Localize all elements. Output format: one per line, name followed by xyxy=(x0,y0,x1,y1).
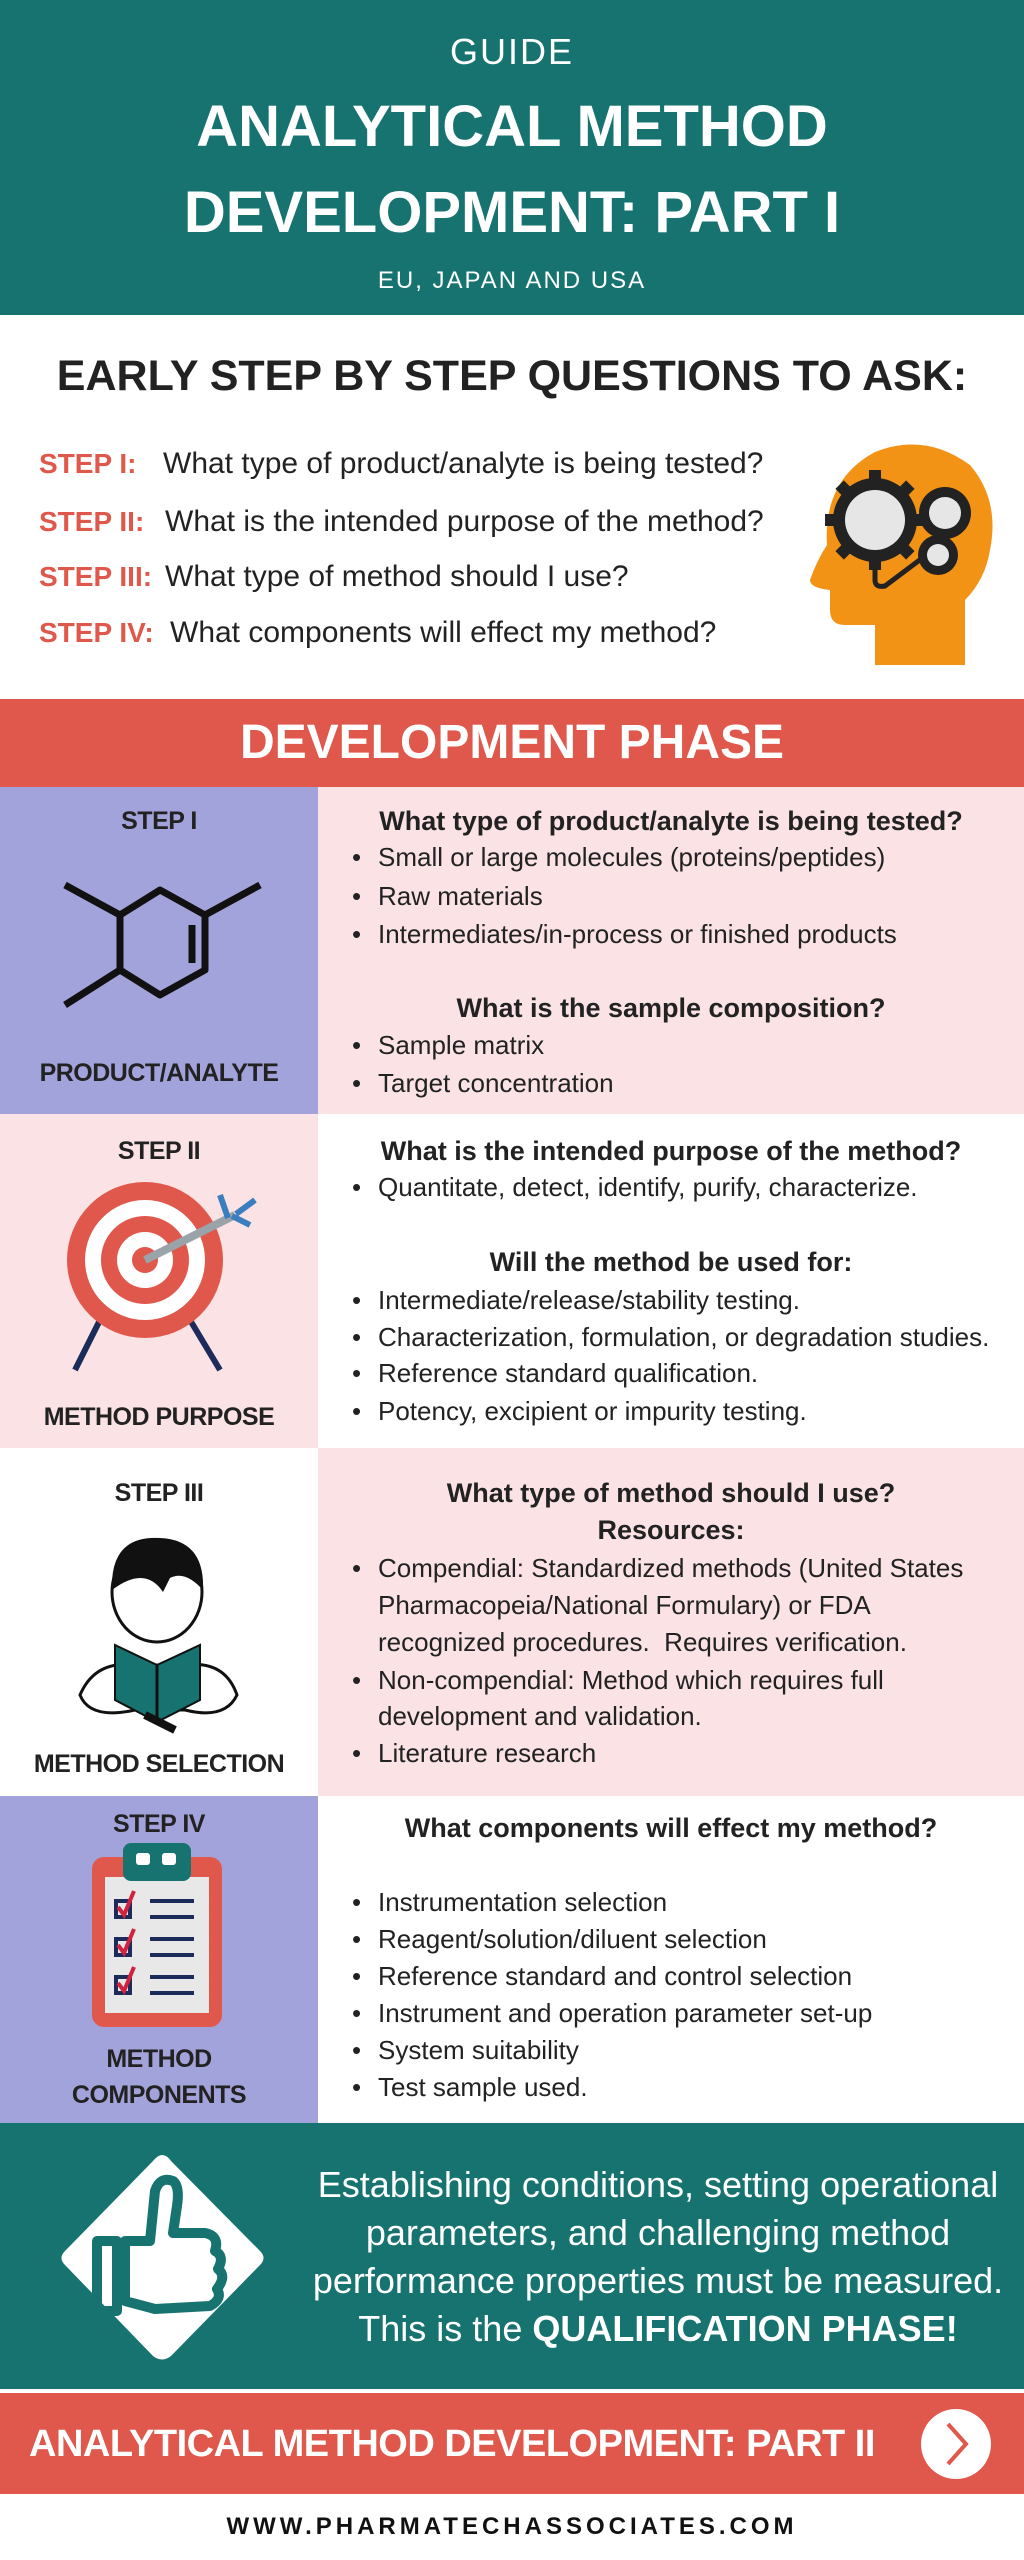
banner: development phase xyxy=(0,699,1024,787)
text: step III content: Pharmacopeia/National Formulary) or FDA xyxy=(378,1590,871,1620)
text: step III content: development and validation. xyxy=(378,1701,702,1731)
text: step II content: Potency, excipient or impurity testing. xyxy=(378,1396,807,1426)
icon: cyclohexene xyxy=(63,882,262,1008)
panel: step II xyxy=(0,1114,318,1448)
subtitle: guide: GUIDE xyxy=(450,31,574,72)
step question list: STEP II: xyxy=(39,506,144,537)
step question list: What is the intended purpose of the method? xyxy=(165,505,764,538)
step question list xyxy=(39,447,764,649)
text: step II content: What is the intended purpose of the method? xyxy=(381,1136,961,1166)
icon: reading child xyxy=(78,1538,239,1734)
text: step II content: Will the method be used for: xyxy=(490,1247,852,1277)
callout text: parameters, and challenging method xyxy=(366,2212,950,2253)
banner: part II link xyxy=(0,2393,1024,2494)
label: step III: STEP III xyxy=(115,1479,203,1507)
text: step II content: Quantitate, detect, identify, purify, characterize. xyxy=(378,1172,918,1202)
callout text xyxy=(313,2164,1003,2349)
text: step IV content xyxy=(353,1813,937,2102)
text: step III content: Resources: xyxy=(597,1515,745,1545)
text: step IV content: Instrument and operation parameter set-up xyxy=(378,1998,872,2028)
panel: step III xyxy=(318,1448,1024,1796)
icon: thumbs up diamond xyxy=(62,2155,264,2360)
title xyxy=(184,94,840,245)
text: step I content: Small or large molecules (proteins/peptides) xyxy=(378,842,885,872)
icon: arrow circle xyxy=(921,2409,991,2479)
label: step II: STEP II xyxy=(118,1137,200,1165)
step question list: STEP I: xyxy=(39,448,137,479)
link text: ANALYTICAL METHOD DEVELOPMENT: PART II xyxy=(29,2423,875,2465)
label: step I: STEP I xyxy=(121,807,197,835)
text: step II content: Reference standard qualification. xyxy=(378,1358,758,1388)
text: step III content: Non-compendial: Method which requires full xyxy=(378,1665,884,1695)
label: method purpose: METHOD PURPOSE xyxy=(44,1403,274,1431)
title: DEVELOPMENT: PART I xyxy=(184,180,840,245)
footer: website: WWW.PHARMATECHASSOCIATES.COM xyxy=(226,2513,798,2540)
callout text: performance properties must be measured. xyxy=(313,2260,1003,2301)
text: step I content: What type of product/analyte is being tested? xyxy=(379,806,963,836)
label: product/analyte: PRODUCT/ANALYTE xyxy=(40,1059,278,1087)
text: step IV content: System suitability xyxy=(378,2035,579,2065)
subtitle: regions: EU, JAPAN AND USA xyxy=(378,267,646,294)
text: step III content: recognized procedures. Requires verification. xyxy=(378,1627,907,1657)
text: step III content: What type of method should I use? xyxy=(447,1478,895,1508)
icon: target with arrow xyxy=(67,1182,257,1372)
callout panel xyxy=(0,2123,1024,2389)
text: step IV content: Test sample used. xyxy=(378,2072,588,2102)
step question list: What type of product/analyte is being tested? xyxy=(163,447,763,480)
title: ANALYTICAL METHOD xyxy=(196,94,828,159)
text: step I content: Sample matrix xyxy=(378,1030,544,1060)
heading: early questions: EARLY STEP BY STEP QUESTIONS TO ASK: xyxy=(57,352,967,400)
callout text: This is the QUALIFICATION PHASE! xyxy=(358,2308,958,2349)
text: step III content: Literature research xyxy=(378,1738,596,1768)
label: method components xyxy=(72,2045,246,2109)
panel: step IV xyxy=(0,1796,318,2123)
label: method selection: METHOD SELECTION xyxy=(34,1750,284,1778)
label: step IV: STEP IV xyxy=(113,1810,205,1838)
banner: development phase: DEVELOPMENT PHASE xyxy=(240,716,784,769)
text: step III content xyxy=(353,1478,963,1768)
label: method components: METHOD xyxy=(106,2045,212,2073)
text: step IV content: Instrumentation selection xyxy=(378,1887,667,1917)
text: step I content: What is the sample composition? xyxy=(456,993,886,1023)
icon: clipboard checklist xyxy=(92,1843,222,2027)
text: step I content: Raw materials xyxy=(378,881,543,911)
text: step II content: Characterization, formulation, or degradation studies. xyxy=(378,1322,989,1352)
text: step II content: Intermediate/release/stability testing. xyxy=(378,1285,800,1315)
step question list: STEP III: xyxy=(39,561,152,592)
step question list: What type of method should I use? xyxy=(165,560,629,593)
text: step I content: Intermediates/in-process or finished products xyxy=(378,919,897,949)
step question list: STEP IV: xyxy=(39,617,154,648)
icon: head with gears xyxy=(810,444,992,665)
text: step I content xyxy=(353,806,963,1098)
text: step IV content: Reagent/solution/diluent selection xyxy=(378,1924,767,1954)
header panel xyxy=(0,0,1024,315)
text: step I content: Target concentration xyxy=(378,1068,614,1098)
text: step IV content: Reference standard and control selection xyxy=(378,1961,852,1991)
step question list: What components will effect my method? xyxy=(170,616,716,649)
text: step IV content: What components will effect my method? xyxy=(405,1813,937,1843)
callout text: Establishing conditions, setting operational xyxy=(318,2164,998,2205)
text: step II content xyxy=(353,1136,989,1426)
label: method components: COMPONENTS xyxy=(72,2081,246,2109)
panel: step I xyxy=(0,787,1024,1114)
text: step III content: Compendial: Standardized methods (United States xyxy=(378,1553,963,1583)
